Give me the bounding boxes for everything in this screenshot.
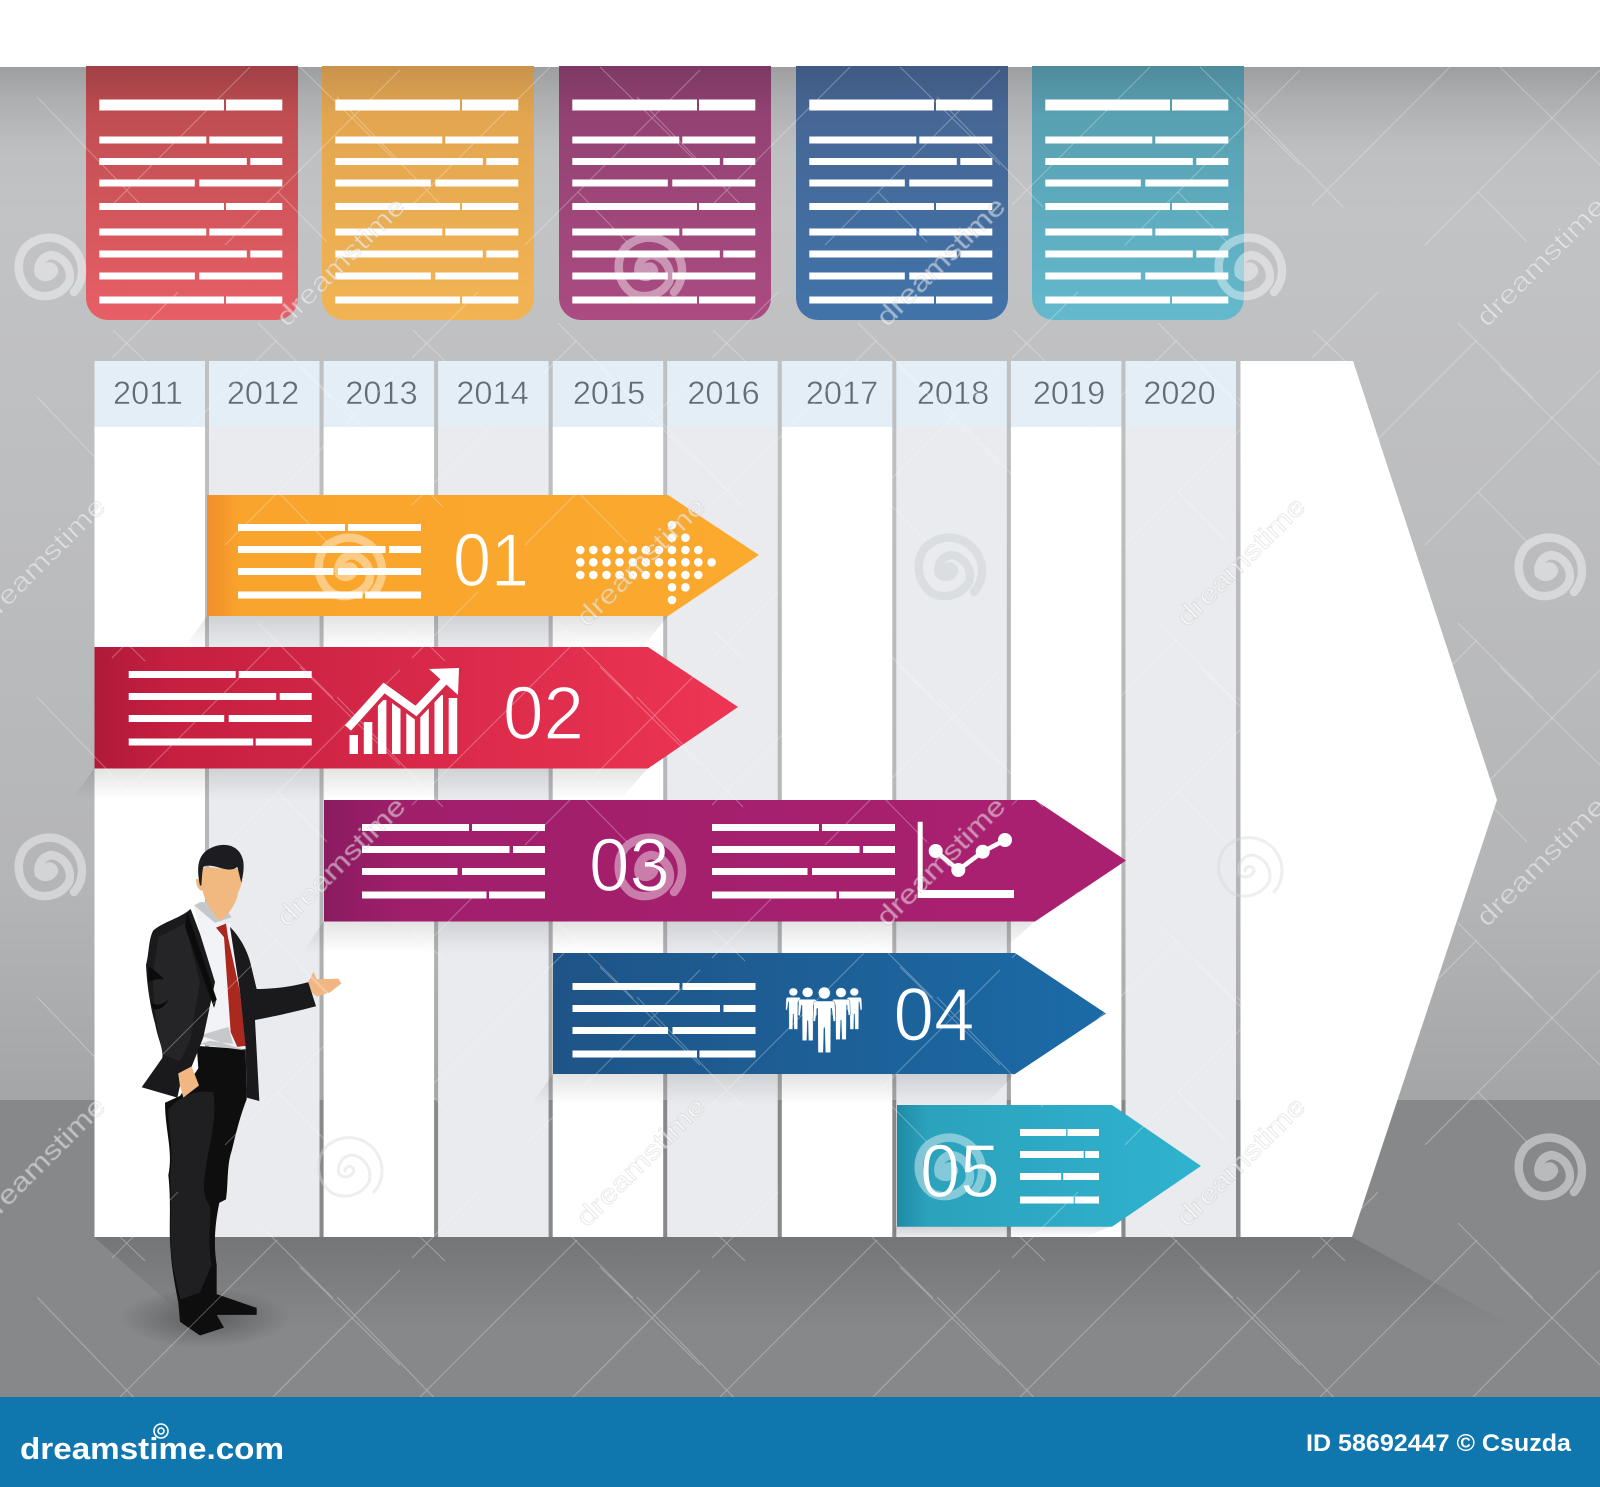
hand by pocket <box>178 1067 199 1098</box>
floor shadow of the timeline <box>94 1237 1520 1330</box>
trousers and shoes <box>165 1046 257 1336</box>
illustration: businessman presenting <box>142 845 341 1336</box>
icon: growth chart <box>346 668 459 754</box>
arrow bar 02 <box>94 647 738 768</box>
arrow bar 04 <box>553 953 1106 1074</box>
image credit: ID 58692447 © Csuzda <box>1306 1430 1572 1457</box>
year headers row: 2016 <box>687 375 760 411</box>
face <box>196 867 242 921</box>
text lines right <box>712 824 895 898</box>
watermark text: dreamstime <box>270 191 411 332</box>
text lines <box>1020 1129 1099 1204</box>
arrow bar 05 <box>897 1105 1201 1227</box>
year headers row: 2019 <box>1033 375 1105 411</box>
watermark text: dreamstime <box>1170 491 1311 632</box>
card: purple <box>559 66 771 320</box>
year headers row: 2014 <box>456 375 529 411</box>
icon: group of people <box>786 987 862 1053</box>
year headers row: 2012 <box>227 375 299 411</box>
figure floor shadow <box>120 1288 290 1348</box>
watermark text: dreamstime <box>870 191 1011 332</box>
text lines <box>238 524 421 598</box>
text lines <box>129 671 312 746</box>
text lines <box>572 983 756 1058</box>
footer banner <box>0 1397 1600 1487</box>
arrow bar 01 <box>207 495 759 616</box>
year headers row: 2013 <box>345 375 418 411</box>
year headers row <box>94 361 1236 427</box>
jacket <box>142 909 316 1101</box>
number 03: 03 <box>589 823 670 907</box>
panel: timeline columns with arrow end <box>94 361 1497 1237</box>
hair <box>198 845 244 886</box>
brand logo text: dreamstime.com <box>20 1431 284 1466</box>
number 05: 05 <box>920 1129 1000 1213</box>
watermark text <box>0 191 1600 1232</box>
text lines left <box>362 824 545 898</box>
year headers row: 2020 <box>1143 375 1216 411</box>
number 04: 04 <box>894 972 974 1056</box>
number 01: 01 <box>453 518 529 602</box>
icon: logo spiral <box>154 1424 168 1438</box>
watermark text: dreamstime <box>570 1091 711 1232</box>
watermark text: dreamstime <box>270 791 411 932</box>
icon: line chart <box>918 822 1014 898</box>
card: red <box>86 66 298 320</box>
year headers row: 2018 <box>917 375 989 411</box>
number 02: 02 <box>503 671 584 755</box>
watermark text: dreamstime <box>1470 191 1600 332</box>
year headers row: 2011 <box>113 375 183 411</box>
watermark spirals <box>19 238 1582 1196</box>
floor <box>0 1100 1600 1397</box>
bar shadows <box>72 616 1112 1237</box>
watermark text: dreamstime <box>1470 791 1600 932</box>
tie <box>216 923 246 1047</box>
panel: five text cards <box>86 66 1244 320</box>
watermark text: dreamstime <box>1170 1091 1311 1232</box>
year headers row: 2015 <box>573 375 645 411</box>
collar <box>194 902 232 923</box>
arrow bar 03 <box>324 800 1126 922</box>
icon: dotted arrow <box>576 521 716 604</box>
card: blue <box>796 66 1008 320</box>
year headers row: 2017 <box>806 375 878 411</box>
shirt <box>194 906 246 1048</box>
watermark text: dreamstime <box>570 491 711 632</box>
card: orange <box>322 66 534 320</box>
card: teal <box>1032 66 1244 320</box>
wall background <box>0 67 1600 1100</box>
presenting hand <box>308 972 341 997</box>
watermark text: dreamstime <box>870 791 1011 932</box>
